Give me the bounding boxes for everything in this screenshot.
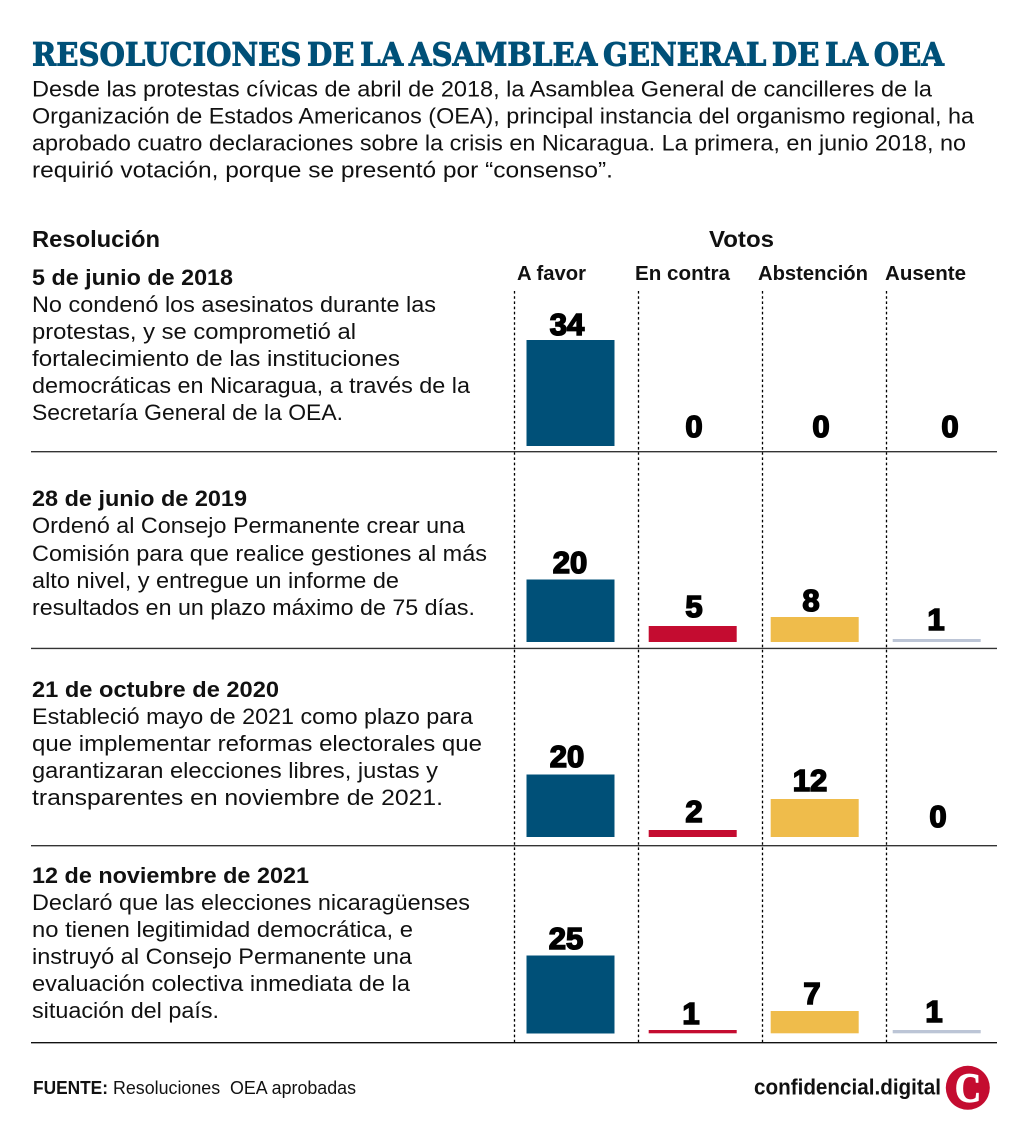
column heading: Resolución: Resolución — [32, 226, 160, 252]
panel: resolution 2019 — [32, 486, 981, 642]
description 2020: garantizaran elecciones libres, justas y — [32, 758, 438, 783]
description 2019: alto nivel, y entregue un informe de — [32, 568, 399, 593]
panel: resolution 2021 — [32, 863, 981, 1034]
description 2020: transparentes en noviembre de 2021. — [32, 785, 443, 810]
description 2019: Comisión para que realice gestiones al más — [32, 541, 487, 566]
vote category headings: A favor — [517, 263, 586, 285]
row dividers — [31, 452, 997, 1043]
bar chart 2020: 20 — [550, 739, 584, 774]
panel: resolution 2020 — [32, 677, 947, 837]
brand name: confidencial.digital — [754, 1074, 941, 1100]
description 2018: Secretaría General de la OEA. — [32, 400, 343, 425]
bar chart 2021: 25 — [549, 921, 583, 956]
date: 28 de junio de 2019: 28 de junio de 2019 — [32, 486, 247, 511]
icon: Confidencial logo — [946, 1064, 990, 1110]
bar chart 2021: 7 — [803, 976, 821, 1011]
vote category headings — [517, 263, 966, 285]
title: RESOLUCIONES DE LA ASAMBLEA GENERAL DE LA OEA — [32, 36, 945, 74]
bar chart 2018: 0 — [941, 409, 959, 444]
description 2021: evaluación colectiva inmediata de la — [32, 971, 411, 996]
description 2018: fortalecimiento de las instituciones — [32, 346, 400, 371]
description 2018: protestas, y se comprometió al — [32, 319, 356, 344]
description 2019 — [32, 513, 487, 620]
panel: resolution 2018 — [32, 265, 959, 446]
vote category headings: Abstención — [758, 263, 868, 285]
bar chart 2019: 8 — [802, 583, 820, 618]
bar chart 2021 — [526, 921, 981, 1034]
description 2020: que implementar reformas electorales que — [32, 731, 482, 756]
description 2021: Declaró que las elecciones nicaragüenses — [32, 890, 470, 915]
description 2021: no tienen legitimidad democrática, e — [32, 917, 413, 942]
source note: FUENTE: — [33, 1078, 108, 1098]
date: 12 de noviembre de 2021: 12 de noviembre de 2021 — [32, 863, 309, 888]
bar chart 2019 — [526, 545, 981, 642]
intro paragraph: Desde las protestas cívicas de abril de 2018, la Asamblea General de cancilleres de la — [32, 76, 933, 102]
intro paragraph — [32, 76, 975, 182]
bar chart 2020: 0 — [929, 799, 947, 834]
description 2020: Estableció mayo de 2021 como plazo para — [32, 704, 474, 729]
bar chart 2020: 2 — [685, 794, 703, 829]
description 2019: Ordenó al Consejo Permanente crear una — [32, 513, 466, 538]
bar chart 2021: 1 — [925, 994, 943, 1029]
intro paragraph: Organización de Estados Americanos (OEA), principal instancia del organismo regional, ha — [32, 104, 975, 128]
vote category headings: Ausente — [885, 263, 966, 285]
description 2020 — [32, 704, 482, 810]
bar chart 2021: 1 — [682, 996, 700, 1031]
description 2021 — [32, 890, 470, 1023]
description 2018: No condenó los asesinatos durante las — [32, 292, 436, 317]
date: 21 de octubre de 2020: 21 de octubre de 2020 — [32, 677, 279, 702]
bar chart 2020: 12 — [793, 763, 827, 798]
description 2019: resultados en un plazo máximo de 75 días. — [32, 595, 475, 620]
vote category headings: En contra — [635, 263, 731, 285]
description 2021: instruyó al Consejo Permanente una — [32, 944, 413, 969]
description 2018 — [32, 292, 471, 425]
bar chart 2019: 5 — [685, 589, 703, 624]
dotted column dividers — [514, 291, 886, 1043]
description 2018: democráticas en Nicaragua, a través de la — [32, 373, 471, 398]
intro paragraph: requirió votación, porque se presentó por “consenso”. — [32, 158, 613, 182]
source note: Resoluciones OEA aprobadas — [113, 1078, 356, 1098]
date: 5 de junio de 2018: 5 de junio de 2018 — [32, 265, 233, 290]
description 2021: situación del país. — [32, 998, 219, 1023]
column heading: Votos: Votos — [709, 226, 774, 252]
bar chart 2018: 34 — [550, 307, 585, 342]
bar chart 2020 — [526, 739, 947, 837]
bar chart 2019: 1 — [927, 602, 945, 637]
icon: Confidencial logo: C — [955, 1064, 981, 1110]
intro paragraph: aprobado cuatro declaraciones sobre la crisis en Nicaragua. La primera, en junio 2018, no — [32, 130, 966, 156]
bar chart 2019: 20 — [553, 545, 587, 580]
bar chart 2018: 0 — [812, 409, 830, 444]
bar chart 2018: 0 — [685, 409, 703, 444]
bar chart 2018 — [526, 307, 959, 446]
